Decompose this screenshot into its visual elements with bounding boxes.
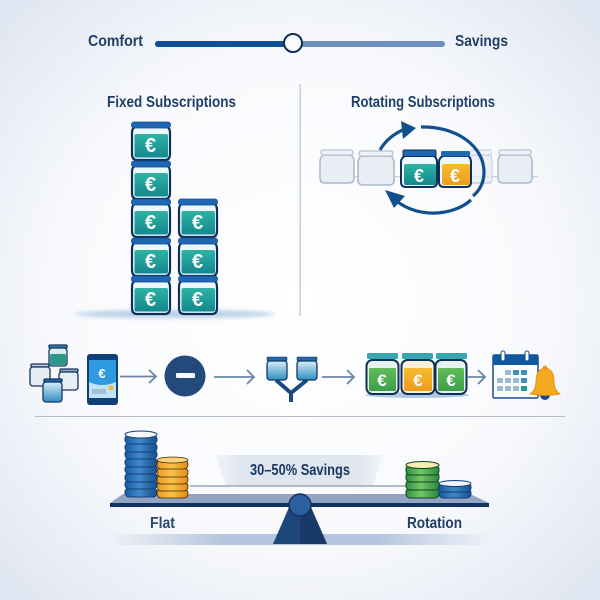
heading: fixed subscriptions: Fixed Subscriptions: [107, 94, 236, 111]
vertical divider: [300, 84, 301, 316]
panel: fixed subscriptions: [75, 94, 275, 318]
yellow coin stack: [157, 457, 188, 498]
arrow: [322, 370, 354, 384]
short jar stack: €: [192, 289, 203, 311]
ground shadow: [105, 534, 495, 545]
short jar stack: €: [192, 212, 203, 234]
inactive jars: [320, 150, 532, 185]
arrow: [468, 370, 485, 384]
label: flat: Flat: [150, 515, 176, 532]
tall jar stack: €: [145, 251, 156, 273]
arrow: [214, 370, 254, 384]
heading: rotating subscriptions: Rotating Subscriptions: [351, 94, 495, 111]
tall jar stack: €: [145, 212, 156, 234]
horizontal divider: [35, 416, 565, 417]
icon: three rotating jars: [365, 353, 469, 398]
slider: comfort to savings: [88, 33, 508, 52]
arrow: [120, 370, 156, 383]
tall jar stack: [132, 122, 170, 314]
slider track: [155, 41, 445, 47]
savings banner: [215, 455, 383, 485]
label: rotation: Rotation: [407, 515, 462, 532]
icon: minus circle: [164, 356, 206, 396]
icon: three rotating jars: €: [413, 371, 423, 390]
active jar: amber: €: [450, 166, 460, 186]
label: savings: Savings: [455, 33, 508, 50]
slider knob: [284, 34, 302, 52]
rear plank line: [190, 485, 412, 487]
icon: jar cluster: [30, 345, 78, 402]
shelf line: [320, 176, 538, 178]
label: comfort: Comfort: [88, 33, 144, 50]
blue coin stack small: [439, 480, 471, 498]
icon: phone: €: [98, 366, 106, 381]
icon: three rotating jars: €: [446, 371, 456, 390]
tall jar stack: €: [145, 289, 156, 311]
tall jar stack: €: [145, 135, 156, 157]
tall jar stack: €: [145, 174, 156, 196]
green coin stack: [406, 462, 439, 498]
savings text: 30–50% Savings: [250, 462, 350, 479]
fulcrum: [273, 494, 327, 544]
icon: splitting jars: [267, 357, 317, 402]
icon: three rotating jars: €: [377, 371, 387, 390]
process flow: [30, 345, 560, 405]
active jar: amber: [439, 151, 471, 187]
rotation arrows: [380, 121, 484, 213]
panel: rotating subscriptions: [320, 94, 538, 213]
short jar stack: [178, 199, 218, 314]
icon: calendar with bell: [493, 351, 560, 400]
blue coin stack: [125, 431, 157, 497]
active jar: teal: [401, 150, 437, 187]
active jar: teal: €: [414, 166, 424, 186]
icon: phone: [87, 354, 118, 405]
savings balance scale: [105, 431, 495, 545]
beam: [110, 494, 489, 507]
base shadow: [75, 310, 275, 318]
short jar stack: €: [192, 251, 203, 273]
